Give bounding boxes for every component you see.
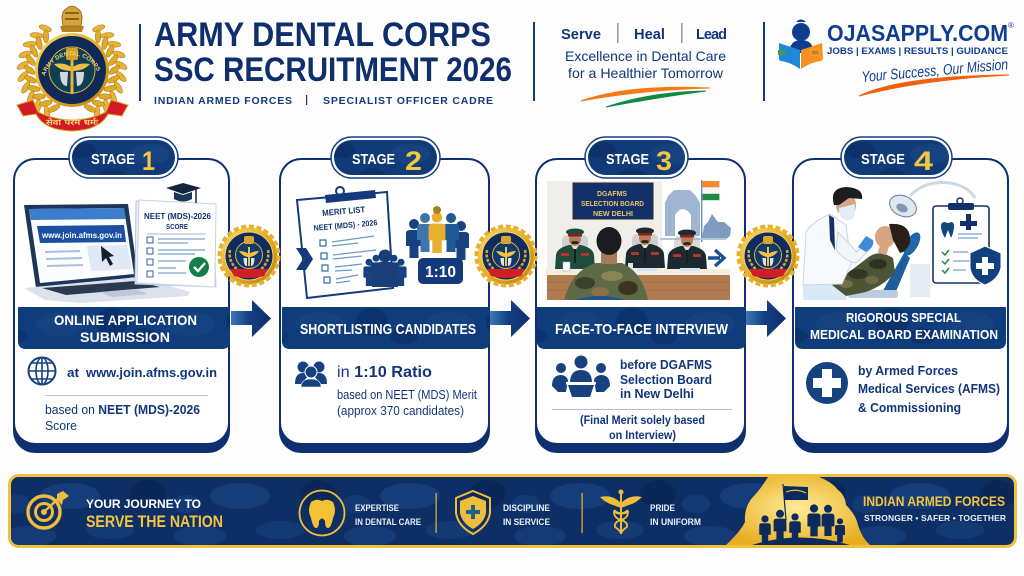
tagline block: Heal bbox=[634, 27, 665, 43]
tagline block: Serve bbox=[561, 27, 601, 43]
discipline label: IN SERVICE bbox=[503, 517, 550, 527]
Ojasapply wordmark: OJASAPPLY.COM bbox=[827, 20, 1008, 46]
stage 4 banner: MEDICAL BOARD EXAMINATION bbox=[810, 328, 998, 342]
stage 1 illustration: NEET score sheet bbox=[135, 183, 216, 287]
tricolour swoosh bbox=[581, 87, 710, 107]
stage 4 pill: STAGE bbox=[861, 151, 905, 168]
Ojasapply slogan bbox=[859, 56, 1009, 96]
arrow: stage 1 to 2 bbox=[231, 300, 271, 337]
stage 2 illustration: merit list clipboard: NEET (MDS) - 2026 bbox=[313, 218, 378, 233]
stage 3 banner bbox=[537, 307, 746, 349]
stage 2 ratio text: based on NEET (MDS) Merit bbox=[337, 388, 477, 402]
stage 1 pill bbox=[69, 137, 178, 178]
stage 1 illustration: NEET score sheet: NEET (MDS)-2026 bbox=[144, 211, 211, 221]
expertise label: EXPERTISE bbox=[355, 503, 399, 513]
footer journey text: YOUR JOURNEY TO bbox=[86, 497, 201, 511]
stage 4 medical cross icon bbox=[806, 362, 848, 404]
dentist bbox=[803, 187, 873, 285]
shield icon bbox=[456, 491, 490, 534]
small arrow bbox=[708, 250, 724, 266]
header divider right bbox=[763, 22, 765, 101]
stage 3 note: (Final Merit solely based bbox=[580, 415, 705, 427]
stage 3 board text: in New Delhi bbox=[620, 386, 694, 401]
stage 2 illustration: merit list clipboard: MERIT LIST bbox=[322, 204, 366, 218]
stage 1 banner: SUBMISSION bbox=[80, 329, 170, 345]
stage 2 ratio text bbox=[337, 364, 477, 418]
stage 2 pill: STAGE bbox=[352, 151, 395, 168]
subtitle: SPECIALIST OFFICER CADRE bbox=[323, 95, 493, 107]
pride label: PRIDE bbox=[650, 503, 675, 513]
footer background bbox=[10, 476, 1016, 546]
stage 1 illustration: laptop bbox=[24, 204, 190, 303]
stage 4 text: by Armed Forces bbox=[858, 363, 958, 378]
Indian Armed Forces slogan: INDIAN ARMED FORCES bbox=[863, 494, 1005, 509]
panel: stage 3 bbox=[535, 137, 746, 453]
stage 1 web address: www.join.afms.gov.in bbox=[85, 365, 217, 380]
stage 3 pill: 3 bbox=[656, 146, 672, 176]
stage 4 illustration: dental examination bbox=[803, 183, 1001, 300]
panel: stage 4 bbox=[792, 137, 1009, 453]
sign board: DGAFMS bbox=[597, 189, 627, 198]
stage 3 board text: Selection Board bbox=[620, 372, 712, 387]
footer banner bbox=[10, 476, 1016, 546]
stage 3 note bbox=[580, 415, 705, 442]
sign board: SELECTION BOARD bbox=[581, 199, 644, 208]
title bbox=[154, 16, 512, 89]
header: emblem of Army Dental Corps bbox=[16, 6, 129, 132]
target icon bbox=[28, 491, 69, 528]
stage 1 score note bbox=[45, 402, 200, 433]
medallion between stages 2 and 3 bbox=[476, 226, 536, 286]
stage 2 ratio text: (approx 370 candidates) bbox=[337, 404, 464, 418]
stage 3 board text bbox=[620, 357, 712, 401]
stage 4 card frame bbox=[792, 158, 1009, 453]
expertise label bbox=[355, 503, 421, 527]
stage 1 card frame bbox=[13, 158, 230, 453]
stage 3 illustration: interview scene bbox=[546, 180, 731, 300]
header divider middle bbox=[533, 22, 535, 101]
medallion between stages 1 and 2 bbox=[220, 226, 278, 286]
arrow: stage 3 to 4 bbox=[746, 300, 786, 337]
sign board bbox=[573, 183, 653, 219]
header divider left bbox=[139, 24, 141, 101]
stage 1 illustration: laptop: www.join.afms.gov.in bbox=[41, 230, 122, 240]
patient in camouflage bbox=[832, 224, 910, 296]
header: emblem of Army Dental Corps: ARMY DENTAL CORPS bbox=[42, 51, 100, 76]
footer journey text: SERVE THE NATION bbox=[86, 513, 223, 531]
stage 1 pill: STAGE bbox=[91, 151, 135, 168]
footer journey text bbox=[86, 497, 223, 531]
stage 4 pill bbox=[841, 137, 952, 178]
header: emblem of Army Dental Corps: सेवा परमं धर्मः bbox=[45, 117, 98, 127]
stage 2 banner: SHORTLISTING CANDIDATES bbox=[300, 321, 476, 338]
stage 4 banner: RIGOROUS SPECIAL bbox=[846, 311, 961, 325]
tagline block: Excellence in Dental Care bbox=[565, 48, 726, 64]
panel officers bbox=[555, 228, 707, 270]
title: ARMY DENTAL CORPS bbox=[154, 16, 491, 54]
medallion between stages 3 and 4 bbox=[738, 226, 798, 286]
candidate seen from behind bbox=[564, 227, 648, 300]
stage 3 banner: FACE-TO-FACE INTERVIEW bbox=[555, 321, 729, 338]
dental chair and lamp bbox=[803, 183, 975, 300]
stage 1 globe icon bbox=[28, 358, 56, 384]
stage 2 ratio text: in 1:10 Ratio bbox=[337, 364, 432, 381]
stage 2 illustration: candidate group bbox=[363, 250, 407, 287]
stage 2 banner bbox=[282, 307, 490, 349]
stage 2 pill: 2 bbox=[405, 146, 422, 176]
stage 1 banner: ONLINE APPLICATION bbox=[54, 312, 197, 328]
stage 1 illustration: NEET score sheet: SCORE bbox=[166, 224, 188, 231]
stage 1 pill: 1 bbox=[142, 146, 155, 176]
title: SSC RECRUITMENT 2026 bbox=[154, 51, 512, 89]
expertise label: IN DENTAL CARE bbox=[355, 517, 421, 527]
stage 1 score note: Score bbox=[45, 418, 77, 433]
tagline block: for a Healthier Tomorrow bbox=[568, 65, 724, 81]
caduceus icon bbox=[600, 490, 642, 534]
panel: stage 1 bbox=[13, 137, 230, 453]
stage 1 banner bbox=[18, 307, 230, 349]
India Gate and flag bbox=[660, 180, 731, 242]
Ojasapply logo icon: reader with open book bbox=[778, 20, 823, 69]
pride label: IN UNIFORM bbox=[650, 517, 701, 527]
sign board: NEW DELHI bbox=[593, 209, 633, 218]
subtitle: INDIAN ARMED FORCES bbox=[154, 95, 292, 107]
arrow: stage 2 to 3 bbox=[490, 300, 530, 337]
stage 2 illustration: 1 in 10 people: 1:10 bbox=[425, 264, 456, 281]
stage 2 illustration: merit list clipboard bbox=[297, 187, 393, 298]
pride label bbox=[650, 503, 701, 527]
stage 3 meeting icon bbox=[552, 356, 610, 397]
table bbox=[546, 262, 730, 300]
subtitle bbox=[154, 95, 493, 107]
Indian Armed Forces slogan bbox=[863, 494, 1006, 523]
Indian Armed Forces slogan: STRONGER • SAFER • TOGETHER bbox=[864, 513, 1006, 523]
stage 4 text bbox=[858, 363, 1000, 415]
stage 3 pill: STAGE bbox=[606, 151, 649, 168]
stage 4 text: Medical Services (AFMS) bbox=[858, 381, 1000, 396]
panel: stage 2 bbox=[279, 137, 490, 453]
stage 4 banner bbox=[795, 307, 1006, 349]
medical clipboard bbox=[933, 198, 1001, 285]
stage 1 web address: at bbox=[67, 365, 80, 380]
soldiers on a hill with flag bbox=[726, 477, 870, 545]
stage 3 card frame bbox=[535, 158, 746, 453]
discipline label: DISCIPLINE bbox=[503, 503, 550, 513]
stage 1 score note: based on NEET (MDS)-2026 bbox=[45, 402, 200, 417]
tooth icon bbox=[300, 490, 344, 536]
Ojasapply wordmark: JOBS | EXAMS | RESULTS | GUIDANCE bbox=[827, 46, 1008, 56]
stage 2 people icon bbox=[295, 362, 327, 387]
stage 4 pill: 4 bbox=[914, 146, 933, 176]
stage 2 card frame bbox=[279, 158, 490, 453]
stage 2 pill bbox=[331, 137, 440, 178]
stage 2 illustration: 1 in 10 people bbox=[406, 206, 469, 284]
tagline block: Lead bbox=[696, 27, 727, 43]
discipline label bbox=[503, 503, 550, 527]
tagline block bbox=[561, 23, 727, 81]
stage 3 pill bbox=[585, 137, 688, 178]
stage 4 text: & Commissioning bbox=[858, 400, 961, 415]
chevron inside stage 2 bbox=[296, 248, 313, 270]
stage 3 note: on Interview) bbox=[609, 430, 676, 442]
stage 3 board text: before DGAFMS bbox=[620, 357, 712, 372]
Ojasapply wordmark: ® bbox=[1008, 21, 1014, 30]
